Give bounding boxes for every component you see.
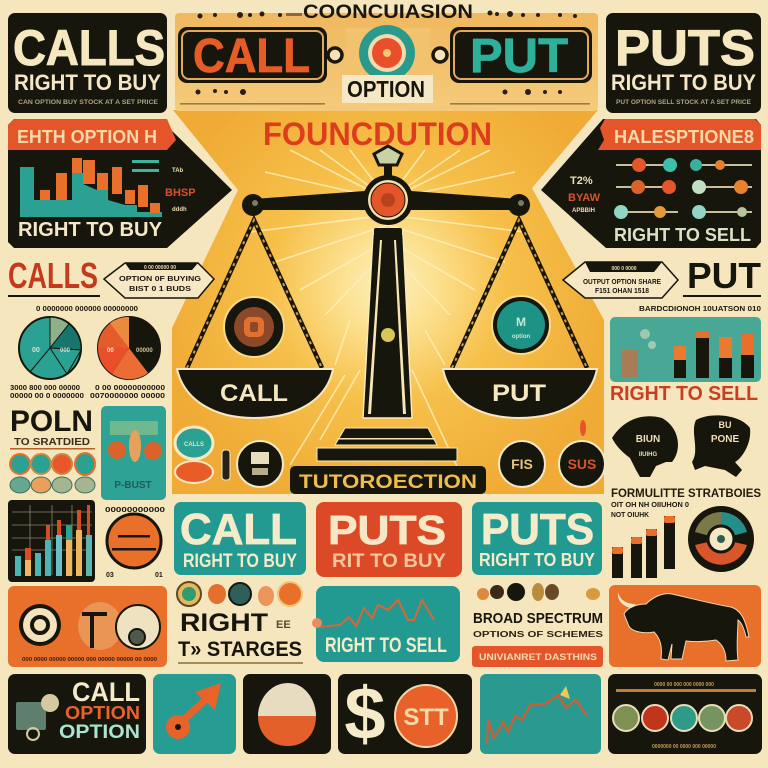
panel: black bowl [243,674,331,754]
panel: call option option: CALL [72,677,140,707]
icons: bear silhouettes: PONE [711,434,739,445]
right medallion [492,296,550,354]
banner: tutorection [290,466,486,494]
small legend text: BHSP [165,187,196,199]
card: line chart right to sell: RIGHT TO SELL [325,634,447,657]
left pan [177,369,333,418]
chart: orange pie: 00 [107,348,114,354]
icon: orange disc: 01 [155,572,163,579]
heading: poln to strategies: POLN [10,405,93,438]
panel: black five badges: 0000000 00 0000 000 00000 [652,744,716,750]
illustration: balance scale [177,146,597,461]
title: conclusion: COONCUIASION [303,2,473,23]
heading: strategies: FORMULITTE STRATBOIES [611,486,761,500]
right chains [452,220,587,368]
block: right strategies: EE [276,619,291,631]
heading: foundation: FOUNCDUTION [263,116,492,152]
panel: call option option: OPTION [65,703,140,723]
callout: put hexagon: F151 OHAN 1518 [595,288,649,295]
card: teal puts right to buy: RIGHT TO BUY [479,550,595,570]
block: right strategies: T» STARGES [178,638,302,661]
panel: calls right to buy: RIGHT TO BUY [14,70,161,95]
right medallion: option [512,334,530,340]
block: broad spectrum: OPTIONS OF SCHEMES [473,630,604,639]
icons: left medallions over yellow: CALLS [184,442,204,448]
badge: put [433,27,592,83]
panel: call option option: OPTION [59,722,140,743]
panel: teal arrow [153,674,236,754]
small text: strategies: OIT OH NH OIIUHON 0 [611,502,689,509]
icon: orange disc: 00000000000 [105,507,165,514]
panel: central yellow background [172,110,604,494]
card: teal puts right to buy [472,502,602,575]
panel: teal strategy card: P-BUST [114,480,152,491]
panel: calls right to buy: CAN OPTION BUY STOCK AT A SET PRICE [18,100,158,106]
panel: black bar chart [8,500,95,582]
card: puts right to buy [316,502,462,577]
right medallion: M [516,315,526,329]
panel: black five badges [608,674,762,754]
card: line chart right to sell [312,586,460,662]
panel: right arrow option sliders [541,119,761,248]
icons: right medallions over yellow: SUS [568,456,596,472]
panel: dollar and stock token: $ [344,672,386,755]
chart: teal pie: 00 [32,347,40,354]
panel: orange illustration card [8,586,167,667]
small legend text: APBBIH [572,208,595,214]
callout: put hexagon: 000 0 0000 [611,266,637,272]
icons: bear silhouettes: BU [718,420,732,430]
chart: orange pie: 00000 [136,348,153,354]
chart: donut [688,506,754,572]
panel: dollar and stock token: STT [403,704,449,731]
icon: orange disc: 03 [106,572,114,579]
callout: calls hexagon: BIST 0 1 BUDS [129,286,191,293]
panel: calls right to buy: CALLS [13,20,165,76]
panel: dollar and stock token [338,672,472,755]
beam [253,191,519,210]
label: right to buy: RIGHT TO BUY [18,219,163,241]
panel: puts right to buy [606,13,761,113]
card: puts right to buy: PUTS [328,507,446,553]
small legend text [165,168,196,213]
icons: bear silhouettes: IIUIHG [639,452,657,458]
small text block under the pies: 3000 800 000 00000 [10,385,80,392]
right pan: PUT [492,380,546,407]
small text: strategies: NOT OIUHK [611,512,649,519]
banner: tutorection: TUTOROECTION [299,472,477,493]
icons: left medallions over yellow [175,427,283,487]
small text block under the pies: 00000 00 0 0000000 [10,393,84,400]
badge: put: PUT [470,30,568,83]
sliders [614,158,752,219]
label: right to sell: RIGHT TO SELL [614,225,751,245]
chart: teal and orange histogram [20,158,162,217]
icons: right medallions over yellow [499,420,605,487]
panel: teal bar chart [610,317,761,382]
panel: puts right to buy: PUT OPTION SELL STOCK AT A SET PRICE [616,100,751,106]
small legend text: T2% [570,175,593,187]
label: right to sell: RIGHT TO SELL [610,383,758,405]
panel: puts right to buy: PUTS [615,20,755,76]
chart: teal pie [19,317,81,379]
small text block under the pies: 0 00 00000000000 [95,385,165,392]
card: puts right to buy: RIT TO BUY [332,551,446,572]
icons: small strategy badges [10,453,95,493]
left pan: CALL [220,380,288,407]
block: right strategies: RIGHT [180,609,268,637]
callout: calls hexagon: OPTION 0F BUYING [119,276,202,283]
panel: call option option [8,674,146,754]
heading: poln to strategies: TO SRATDIED [14,437,90,448]
right pan [443,369,597,418]
block: broad spectrum: UNIVIANRET DASTHINS [479,652,597,662]
block: broad spectrum [472,583,604,667]
panel: black five badges: 0000 00 000 000 0000 000 [654,682,714,688]
label: option: EHTH OPTION H [17,127,157,147]
small legend text: TAb [172,168,184,174]
pivots [242,146,530,225]
block: broad spectrum: BROAD SPECTRUM [473,610,603,627]
icons: bear silhouettes: BIUN [636,434,660,445]
icon: rising arrow [166,683,221,739]
small text: strategies [611,502,689,519]
scale post and base [317,228,457,461]
left medallion [224,297,284,357]
panel: teal line chart [480,674,601,754]
label: option: OPTION [347,76,425,102]
panel: orange illustration card: 000 0000 00000 00000 000 00000 00000 00 0000 [22,657,157,663]
small legend text: BYAW [568,192,601,204]
icons: bear silhouettes [612,415,750,477]
small legend text [568,175,601,214]
callout: calls hexagon [104,263,214,298]
callout: put hexagon: OUTPUT OPTION SHARE [583,279,661,286]
panel: calls right to buy [8,13,167,113]
panel: teal strategy card [101,406,166,500]
heading: calls: CALLS [8,255,98,296]
badge: call: CALL [193,30,310,83]
small legend text: dddh [172,207,187,213]
left chains [187,220,322,368]
small text block under the pies [10,385,165,400]
chart: teal pie: 000 [60,348,71,354]
chart: orange-capped bars [612,516,675,578]
heading: put: PUT [687,255,761,296]
panel: conclusion header band [175,2,598,111]
block: right strategies [177,582,303,664]
icon: orange disc [105,507,165,579]
dotted details above and below the badges [180,10,590,105]
card: teal puts right to buy: PUTS [481,505,594,554]
card: call right to buy [174,502,306,575]
caption: teal chart: BARDCDIONOH 10UATSON 010 [639,306,761,313]
card: call right to buy: RIGHT TO BUY [183,551,297,572]
chart: orange pie [98,317,160,379]
icon: option medallion [346,25,430,81]
icon: bull silhouette [618,592,749,661]
panel: puts right to buy: RIGHT TO BUY [611,70,756,95]
card: call right to buy: CALL [180,505,297,554]
label: option: HALESPTIONE8 [614,127,754,147]
caption: pie charts: 0 0000000 000000 00000000 [36,306,138,313]
panel: bull [609,585,761,667]
small text block under the pies: 0070000000 00000 [90,393,165,400]
icons: right medallions over yellow: FIS [511,456,533,472]
panel: left arrow option chart [8,119,232,248]
callout: put hexagon [563,262,678,298]
callout: calls hexagon: 0 00 00000 00 [144,265,176,271]
